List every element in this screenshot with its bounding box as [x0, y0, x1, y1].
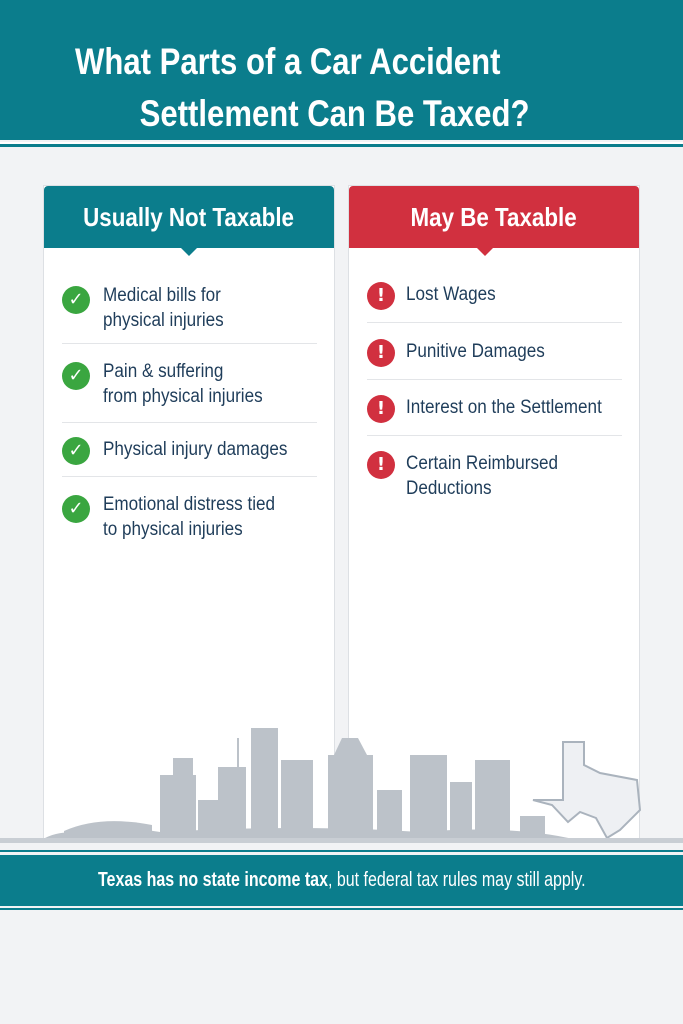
item: interest: [367, 395, 602, 423]
item: physical injury damages: Physical injury damages: [103, 439, 287, 460]
heading: may be taxable: May Be Taxable: [411, 202, 577, 232]
item: lost wages: Lost Wages: [406, 284, 496, 305]
item: physical injury damages: ✓: [68, 440, 84, 461]
item: medical bills: Medical bills for: [103, 285, 221, 306]
item: emotional distress: ✓: [68, 498, 84, 519]
item: emotional distress: [62, 494, 275, 540]
item: pain and suffering: [62, 361, 263, 407]
skyline illustration: [0, 728, 683, 843]
panel: usually not taxable: [43, 185, 335, 842]
title: What Parts of a Car Accident: [75, 41, 500, 82]
heading: usually not taxable: Usually Not Taxable: [84, 202, 294, 232]
item: reimbursed deductions: Certain Reimbursed: [406, 453, 558, 474]
item: pain and suffering: Pain & suffering: [103, 361, 223, 382]
item: medical bills: physical injuries: [103, 310, 224, 331]
item: pain and suffering: ✓: [68, 365, 84, 386]
item: medical bills: ✓: [68, 289, 84, 310]
item: reimbursed deductions: !: [377, 454, 385, 475]
item: reimbursed deductions: [367, 451, 558, 499]
icon: texas outline: [533, 742, 640, 838]
item: medical bills: [62, 285, 224, 331]
item: pain and suffering: from physical injuries: [103, 386, 263, 407]
item: lost wages: [367, 282, 496, 310]
item: physical injury damages: [62, 437, 287, 465]
item: punitive damages: Punitive Damages: [406, 341, 545, 362]
item: punitive damages: [367, 339, 545, 367]
item: lost wages: !: [377, 285, 385, 306]
title: [75, 41, 529, 134]
text: Texas has no state income tax, but federal tax rules may still apply.: [98, 869, 585, 891]
item: emotional distress: Emotional distress tied: [103, 494, 275, 515]
heading: usually not taxable: [44, 186, 334, 248]
item: interest: Interest on the Settlement: [406, 397, 602, 418]
title: Settlement Can Be Taxed?: [140, 93, 529, 134]
panel: may be taxable: [348, 185, 640, 842]
item: interest: !: [377, 398, 385, 419]
item: emotional distress: to physical injuries: [103, 519, 243, 540]
item: punitive damages: !: [377, 342, 385, 363]
footer banner: [0, 850, 683, 852]
item: reimbursed deductions: Deductions: [406, 478, 492, 499]
header banner: [0, 0, 683, 140]
heading: may be taxable: [349, 186, 639, 248]
